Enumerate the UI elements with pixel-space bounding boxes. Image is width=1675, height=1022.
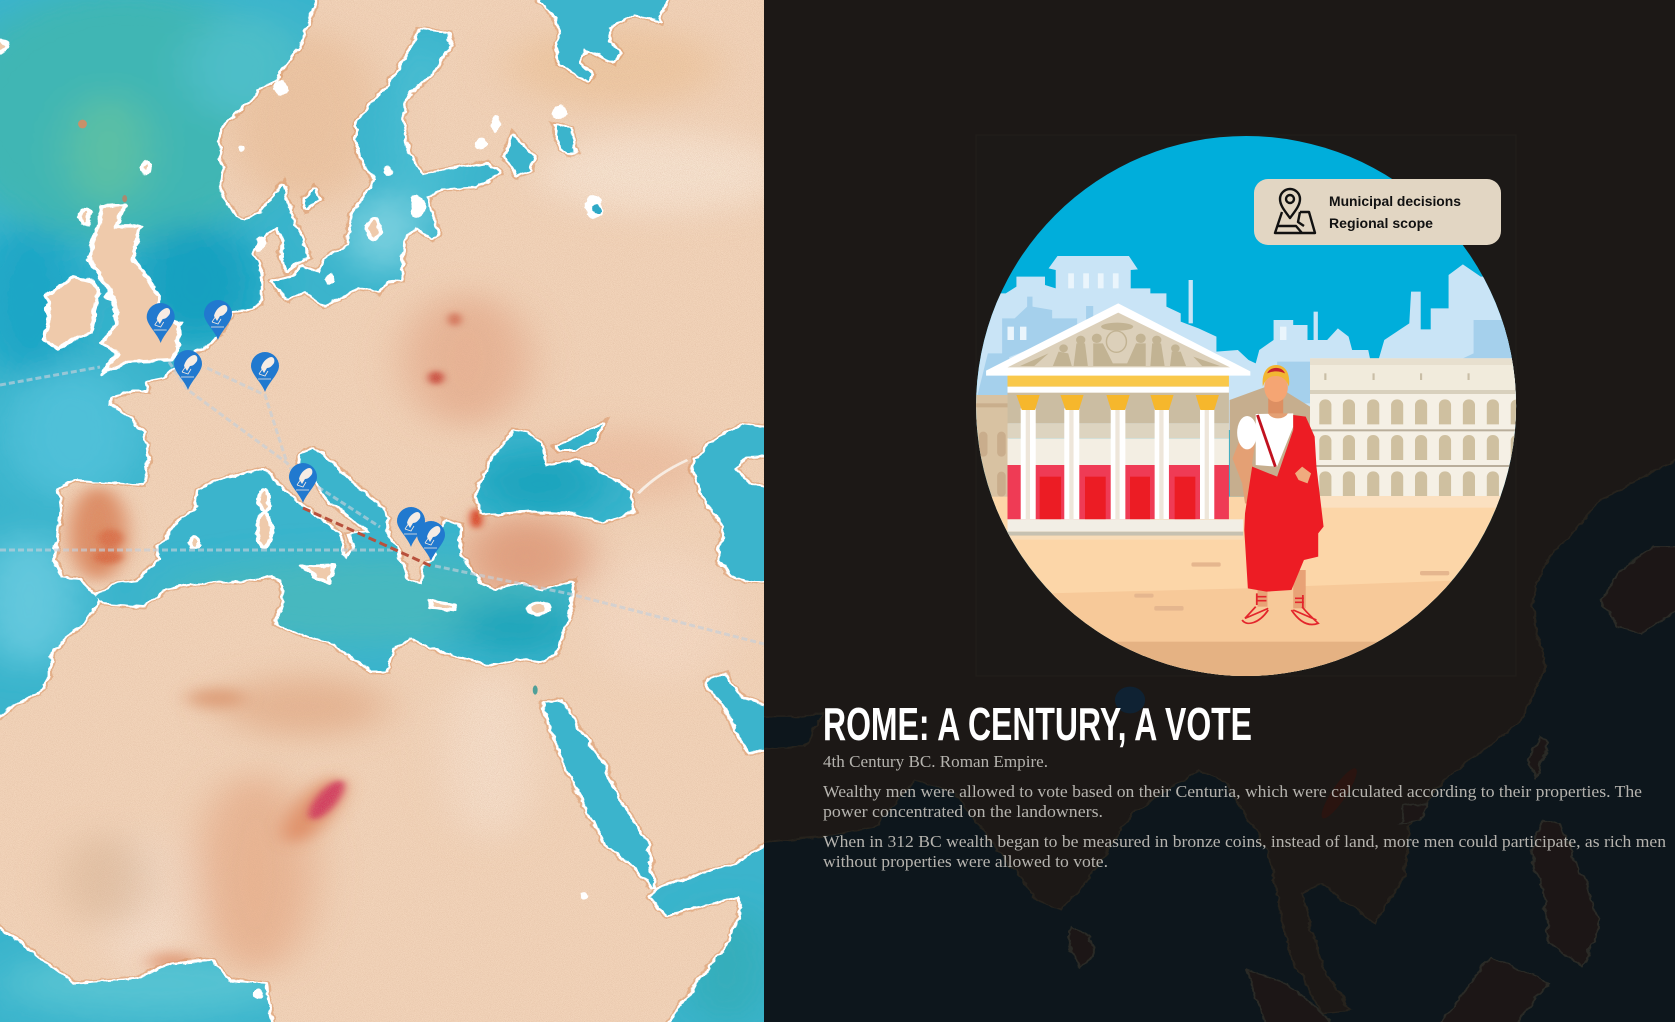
pin: northern France <box>174 350 202 390</box>
route lines: dashed connections between pins <box>0 362 764 644</box>
distant skyline <box>970 256 1530 430</box>
info box: scope of decisions <box>1254 179 1501 245</box>
body text <box>823 752 1666 871</box>
paragraph one <box>823 782 1642 821</box>
water bodies with white coastlines <box>0 0 795 1022</box>
pin: Athens <box>417 521 445 561</box>
paper grain texture <box>0 0 764 1022</box>
legs <box>1258 590 1268 607</box>
side building left <box>976 395 1008 518</box>
temple steps <box>1008 519 1243 532</box>
paragraph two: When in 312 BC wealth began to be measured in bronze coins, instead of land, more men could participate, as rich men <box>823 832 1666 851</box>
dark panel background: dimmed map of Asia <box>764 459 1675 1022</box>
pin: Low Countries <box>204 300 232 340</box>
building behind figure <box>1230 384 1310 497</box>
map pins: voting locations <box>147 300 445 561</box>
temple with columns <box>986 303 1250 540</box>
colosseum building right <box>1310 358 1530 508</box>
paragraph two <box>823 832 1666 871</box>
islands <box>0 33 547 614</box>
toga <box>1244 415 1324 592</box>
paragraph two: without properties were allowed to vote. <box>823 852 1108 871</box>
sandals <box>1242 593 1318 625</box>
sky <box>970 130 1530 690</box>
paragraph one: Wealthy men were allowed to vote based on their Centuria, which were calculated according to their properties. The <box>823 782 1642 801</box>
pediment <box>986 303 1250 376</box>
toga-clad Roman figure <box>1232 365 1324 625</box>
label: Municipal decisions: Municipal decisions <box>1329 194 1461 209</box>
head and wreath <box>1263 365 1289 415</box>
pin: Germany <box>251 352 279 392</box>
pin: Rome <box>289 463 317 503</box>
date and place: 4th Century BC. Roman Empire. <box>823 752 1048 771</box>
ground <box>992 496 1500 676</box>
arm and tunic <box>1232 442 1255 504</box>
pin: Britain <box>147 303 175 343</box>
paragraph one: power concentrated on the landowners. <box>823 802 1103 821</box>
pin: northern Greece <box>397 507 425 547</box>
icon: map with location pin <box>1275 189 1315 233</box>
illustration: Roman citizen in front of forum, framed in a circle <box>970 130 1530 690</box>
title: ROME: A CENTURY, A VOTE <box>823 698 1252 750</box>
columns <box>1016 395 1219 527</box>
label: Regional scope: Regional scope <box>1329 216 1434 231</box>
